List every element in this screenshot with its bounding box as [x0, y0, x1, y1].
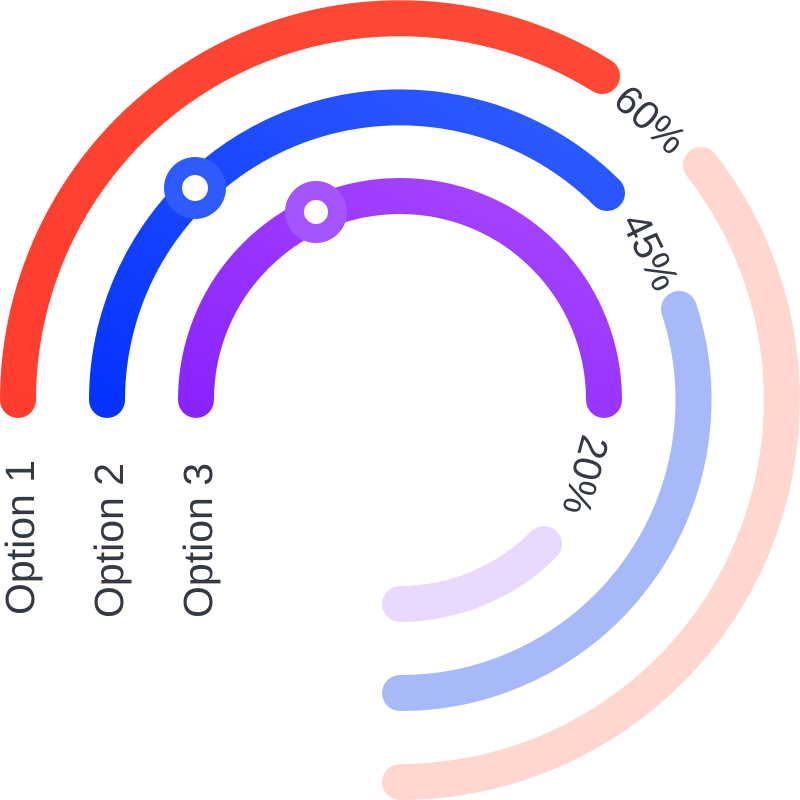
arc: option 2 remainder	[400, 309, 693, 693]
knob: blue	[164, 157, 226, 219]
arc: option 3 value 20%	[196, 196, 604, 400]
arc: option 1 remainder	[400, 165, 782, 782]
label 20%: 20%	[553, 431, 617, 519]
arc: option 1 value 60%	[18, 18, 602, 400]
knob: purple	[285, 181, 347, 243]
arc: option 2 value 45%	[107, 107, 607, 400]
label 45%: 45%	[613, 206, 687, 298]
label Option 2: Option 2	[86, 463, 132, 618]
label Option 3: Option 3	[175, 463, 221, 618]
arc: option 3 remainder	[400, 544, 544, 604]
label 60%: 60%	[606, 77, 694, 163]
